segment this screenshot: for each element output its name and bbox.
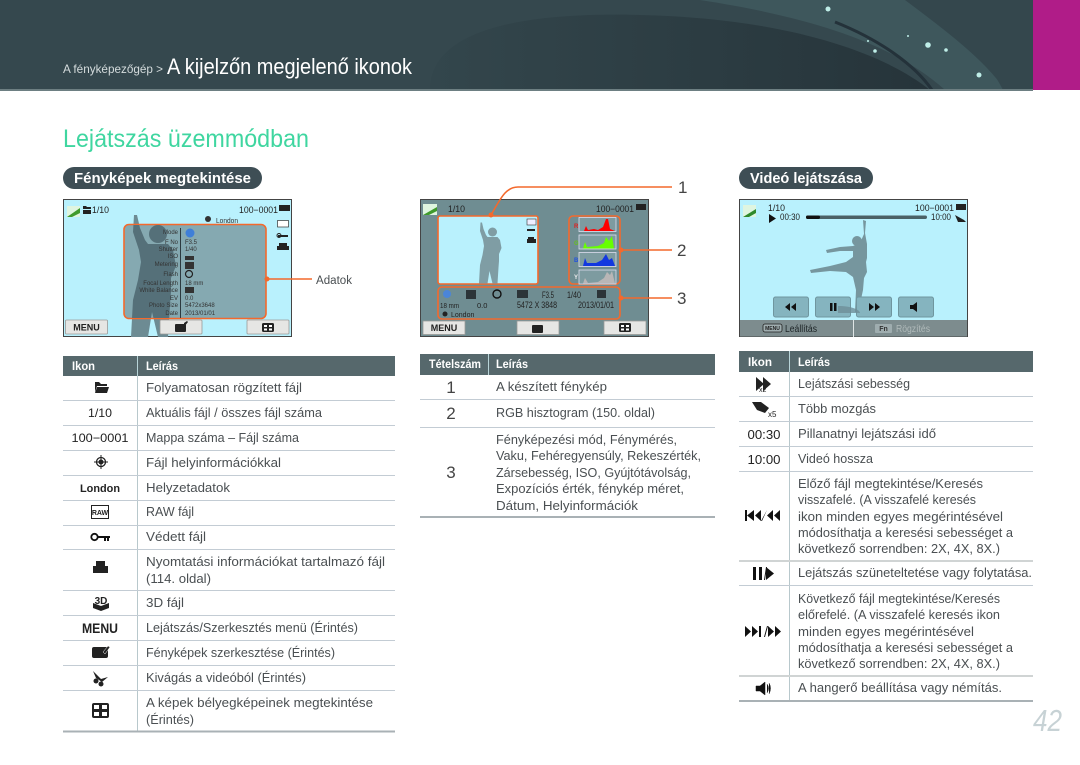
RGB histograms: G	[574, 241, 579, 247]
screen 3: video playback: MENU	[765, 326, 780, 332]
data panel: 0.0	[185, 296, 194, 302]
data panel: EV	[170, 296, 178, 302]
callout: Adatok: Adatok	[316, 275, 352, 287]
screen 2: histogram view	[420, 200, 648, 336]
descriptions column: Fájl helyinformációkkal	[146, 455, 281, 470]
screen 3: video playback: 00:30	[780, 212, 800, 222]
descriptions column: módosíthatja a keresési sebességet a	[798, 640, 1014, 655]
item descriptions: Vaku, Fehéregyensúly, Rekeszérték,	[496, 448, 701, 463]
table header	[739, 351, 1033, 372]
page number: 42	[1033, 703, 1062, 738]
icons column: x5	[768, 410, 777, 419]
icons column	[72, 382, 129, 718]
data panel: Mode	[163, 230, 179, 236]
data panel: Shutter	[159, 247, 178, 253]
data panel: 1/40	[185, 247, 197, 253]
callout 2: 2	[677, 241, 686, 260]
descriptions column: Pillanatnyi lejátszási idő	[798, 426, 936, 441]
screen 1: photo info	[64, 200, 292, 337]
photo preview	[438, 216, 538, 284]
descriptions column: következő sorrendben: 2X, 4X, 8X.)	[798, 656, 1000, 671]
screen 2: histogram view: 1/10	[448, 204, 465, 214]
screen 3: video playback: 1/10	[768, 203, 785, 213]
data panel: F3.5	[185, 240, 198, 246]
shooting data panel: 18 mm	[440, 301, 459, 310]
shooting data panel	[438, 287, 620, 319]
descriptions column: Előző fájl megtekintése/Keresés	[798, 476, 983, 491]
icons column: RAW	[92, 510, 109, 517]
descriptions column: ikon minden egyes megérintésével	[798, 509, 1003, 524]
breadcrumb	[63, 54, 413, 79]
heading pill: photos: Fényképek megtekintése	[74, 170, 251, 187]
descriptions column: Védett fájl	[146, 529, 206, 544]
shooting data panel: 5472 X 3848	[517, 300, 557, 310]
header banner	[0, 0, 1033, 91]
item descriptions: Zársebesség, ISO, Gyújtótávolság,	[496, 465, 691, 480]
screen 1: photo info: 100−0001	[239, 205, 278, 215]
data panel	[123, 224, 267, 320]
breadcrumb: A kijelzőn megjelenő ikonok	[167, 54, 413, 79]
item descriptions	[496, 379, 701, 513]
callout 1: 1	[678, 178, 687, 197]
RGB histograms	[569, 216, 620, 284]
icons column: x2	[759, 387, 766, 394]
icons column: 00:30	[748, 427, 780, 442]
item descriptions: RGB hisztogram (150. oldal)	[496, 405, 655, 420]
icons column: MENU	[82, 620, 118, 636]
item descriptions: Expozíciós érték, fénykép méret,	[496, 481, 684, 496]
shooting data panel: 1/40	[567, 290, 581, 300]
screen 1: photo info: 1/10	[92, 205, 109, 215]
descriptions column: (Érintés)	[146, 712, 194, 727]
data panel: 2013/01/01	[185, 311, 216, 317]
RGB histograms: R	[574, 224, 579, 230]
shooting data panel: 0.0	[477, 301, 487, 310]
descriptions column: módosíthatja a keresési sebességet a	[798, 525, 1014, 540]
item numbers: 1	[446, 378, 456, 397]
icons column: 1/10	[88, 406, 112, 420]
data panel: 18 mm	[185, 281, 203, 287]
table header: Ikon	[748, 355, 772, 369]
breadcrumb: A fényképezőgép >	[63, 62, 163, 76]
item descriptions: Fényképezési mód, Fénymérés,	[496, 432, 677, 447]
descriptions column: Folyamatosan rögzített fájl	[146, 380, 302, 395]
screen 3: video playback: Rögzítés	[896, 324, 930, 335]
ballerina silhouette	[810, 220, 867, 312]
data panel: Date	[165, 311, 179, 317]
screen 2: histogram view: MENU	[431, 323, 457, 333]
screen 3: video playback: Fn	[879, 326, 888, 333]
descriptions column: Lejátszási sebesség	[798, 376, 910, 391]
table header: Ikon	[72, 359, 95, 373]
item numbers: 2	[446, 404, 456, 423]
callout 2	[618, 241, 686, 260]
descriptions column: Videó hossza	[798, 451, 874, 466]
descriptions column: A hangerő beállítása vagy némítás.	[798, 680, 1002, 695]
screen 3: video playback: Leállítás	[785, 324, 817, 335]
icons column: 3D	[95, 596, 107, 607]
data panel: 5472x3648	[185, 303, 215, 309]
icons column	[745, 377, 781, 695]
descriptions column: (114. oldal)	[146, 571, 211, 586]
data panel: Photo Size	[149, 303, 179, 309]
descriptions column: Kivágás a videóból (Érintés)	[146, 670, 306, 685]
item numbers	[446, 378, 456, 482]
magenta tab	[1033, 0, 1080, 90]
icons column: 100−0001	[72, 431, 129, 445]
heading pill: video: Videó lejátszása	[750, 170, 863, 187]
table header: Leírás	[496, 357, 528, 371]
table: video icons	[739, 351, 1033, 701]
table header	[420, 354, 715, 375]
data panel: Metering	[155, 262, 178, 268]
screen 3: video playback: 100−0001	[915, 203, 954, 213]
icons column: 10:00	[748, 452, 780, 467]
RGB histograms: Y	[574, 275, 578, 281]
screen 3: video playback	[740, 200, 968, 337]
descriptions column: Lejátszás szüneteltetése vagy folytatása.	[798, 565, 1032, 580]
screen 2: histogram view: 100−0001	[596, 204, 634, 214]
table header: Leírás	[798, 355, 830, 369]
data panel: White Balance	[139, 288, 179, 294]
descriptions column: Helyzetadatok	[146, 480, 230, 495]
item descriptions: A készített fénykép	[496, 379, 607, 394]
descriptions column: Mappa száma – Fájl száma	[146, 430, 300, 445]
screen 3: video playback: 10:00	[931, 212, 951, 222]
screen 1: photo info: London	[216, 216, 238, 225]
descriptions column: következő sorrendben: 2X, 4X, 8X.)	[798, 541, 1000, 556]
table header: Leírás	[146, 359, 178, 373]
heading pill: video	[739, 167, 873, 189]
descriptions column: 3D fájl	[146, 595, 184, 610]
descriptions column: visszafelé. (A visszafelé keresés	[798, 492, 976, 507]
table header	[63, 356, 395, 376]
data panel: Flash	[163, 272, 178, 278]
item descriptions: Dátum, Helyinformációk	[496, 498, 638, 513]
data panel: ISO	[168, 254, 178, 260]
data panel: Focal Length	[143, 281, 178, 287]
descriptions column: előrefelé. (A visszafelé keresés ikon	[798, 607, 1000, 622]
table: item numbers	[420, 354, 715, 517]
item numbers: 3	[446, 463, 456, 482]
descriptions column: Nyomtatási információkat tartalmazó fájl	[146, 554, 385, 569]
icons column: London	[80, 483, 120, 495]
shooting data panel: F3.5	[542, 290, 554, 300]
screen 1: photo info: MENU	[73, 322, 100, 332]
shooting data panel: London	[451, 312, 474, 319]
callout 1	[488, 178, 687, 218]
RGB histograms: B	[574, 258, 579, 264]
descriptions column: Lejátszás/Szerkesztés menü (Érintés)	[146, 620, 358, 635]
callout 3: 3	[677, 289, 686, 308]
descriptions column: RAW fájl	[146, 504, 194, 519]
descriptions column: Több mozgás	[798, 401, 876, 416]
shooting data panel: 2013/01/01	[578, 300, 614, 310]
descriptions column: minden egyes megérintésével	[798, 624, 974, 639]
heading pill: photos	[63, 167, 262, 189]
descriptions column: Fényképek szerkesztése (Érintés)	[146, 645, 335, 660]
descriptions column: Következő fájl megtekintése/Keresés	[798, 591, 1000, 606]
data panel: F No	[165, 240, 179, 246]
table: photo icons	[63, 356, 395, 732]
descriptions column	[798, 376, 1032, 695]
descriptions column: Aktuális fájl / összes fájl száma	[146, 405, 323, 420]
descriptions column: A képek bélyegképeinek megtekintése	[146, 695, 373, 710]
table header: Tételszám	[429, 357, 481, 371]
title: Lejátszás üzemmódban	[63, 125, 309, 153]
callout: Adatok	[264, 275, 352, 287]
descriptions column	[146, 380, 385, 727]
callout 3	[618, 289, 686, 308]
